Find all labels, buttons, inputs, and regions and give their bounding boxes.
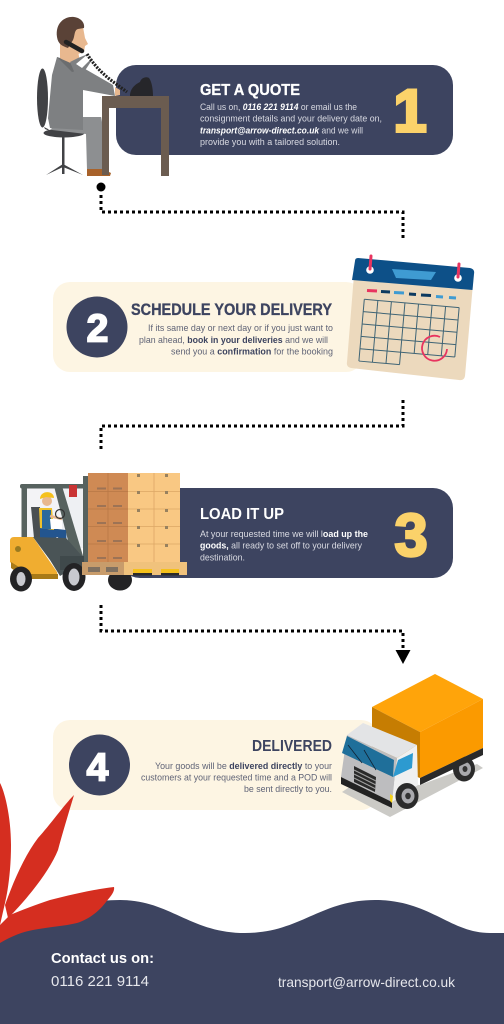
contact block (51, 951, 456, 990)
text block: loading details: destination. (200, 552, 245, 562)
heading: load it up: LOAD IT UP (200, 506, 284, 523)
desk (102, 96, 169, 176)
calendar dashes (367, 290, 456, 298)
load wheel (108, 570, 132, 590)
light boxes (128, 473, 180, 565)
face (66, 26, 88, 54)
icon: delivery truck (341, 674, 483, 817)
windshield (342, 736, 394, 777)
rear wheel (10, 566, 32, 592)
engine cover (33, 537, 82, 576)
text block: schedule details: send you a confirmation for the booking (171, 346, 333, 356)
front wheel (396, 783, 418, 809)
heading: delivered: DELIVERED (252, 738, 332, 755)
text block: delivery details: Your goods will be delivered directly to your (155, 761, 332, 771)
jacket (48, 57, 115, 130)
calendar rings (366, 256, 462, 282)
text block: loading details (200, 529, 368, 562)
pallet (82, 562, 187, 576)
mast base (60, 556, 84, 570)
dotted route 2 (101, 400, 403, 451)
text block: schedule details: If its same day or next day or if you just want to (148, 323, 333, 333)
number 1: 1 (393, 78, 427, 144)
bumper (341, 777, 392, 808)
text block: delivery details (141, 761, 332, 794)
icon: calendar (347, 256, 474, 380)
panel: schedule your delivery (53, 282, 363, 372)
dark boxes (88, 473, 128, 565)
shirt (82, 88, 102, 117)
handset (66, 42, 82, 51)
cab (341, 723, 418, 808)
raised arm (70, 54, 92, 76)
legs (48, 116, 103, 170)
rear wheel (453, 756, 475, 782)
wipers (348, 745, 376, 770)
cab interior (27, 488, 82, 550)
shoes (87, 169, 111, 176)
number 3: 3 (394, 502, 428, 569)
text block: delivery details: be sent directly to you. (244, 784, 332, 794)
dotted route 3 with arrow (101, 605, 410, 664)
forklift body (10, 537, 58, 578)
date circle (422, 336, 447, 361)
icon: man on telephone at desk (37, 17, 169, 176)
icon: forklift with pallet (10, 473, 187, 592)
text block: quote details: consignment details and your delivery date on, (200, 114, 382, 124)
text block: schedule details (139, 323, 333, 356)
neck (60, 44, 80, 67)
chair (37, 68, 84, 175)
hand (115, 87, 120, 96)
text block: quote details: transport@arrow-direct.co.uk and we will (200, 126, 363, 136)
email address: transport@arrow-direct.co.uk (278, 974, 456, 990)
number 2 badge (66, 296, 128, 358)
text block: quote details (200, 102, 382, 147)
heading: get a quote: GET A QUOTE (200, 82, 300, 99)
phone number: 0116 221 9114 (51, 973, 149, 990)
red leaf decoration (0, 783, 114, 943)
text block: quote details: provide you with a tailored solution. (200, 137, 340, 147)
worker (39, 492, 69, 552)
warning light (69, 485, 77, 497)
seat (31, 507, 56, 538)
side window (393, 753, 413, 777)
calendar grid (359, 299, 459, 369)
number 2 badge: 2 (87, 308, 108, 350)
cargo box (372, 674, 483, 785)
heading: schedule your delivery: SCHEDULE YOUR DELIVERY (131, 301, 332, 319)
number 4 badge: 4 (87, 746, 109, 790)
telephone (130, 77, 153, 96)
hair (57, 17, 84, 48)
text block: quote details: Call us on, 0116 221 9114 or email us the (200, 102, 357, 112)
panel: get a quote (116, 65, 453, 155)
text block: delivery details: customers at your requested time and a POD will (141, 772, 332, 782)
ground shadow (342, 764, 483, 817)
text block: schedule details: plan ahead, book in your deliveries and we will (139, 335, 328, 345)
footer wave (0, 900, 504, 1024)
text block: loading details: At your requested time we will load up the (200, 529, 368, 539)
front wheel (62, 563, 86, 591)
contact heading: Contact us on: (51, 951, 154, 967)
number 4 badge (69, 734, 130, 796)
grille (354, 766, 376, 792)
dotted route 1 (96, 182, 403, 240)
panel: delivered (53, 720, 378, 810)
roof and pillars (20, 476, 89, 566)
panel: load it up (120, 488, 453, 578)
text block: loading details: goods, all ready to set off to your delivery (200, 540, 362, 550)
cord (87, 54, 127, 92)
